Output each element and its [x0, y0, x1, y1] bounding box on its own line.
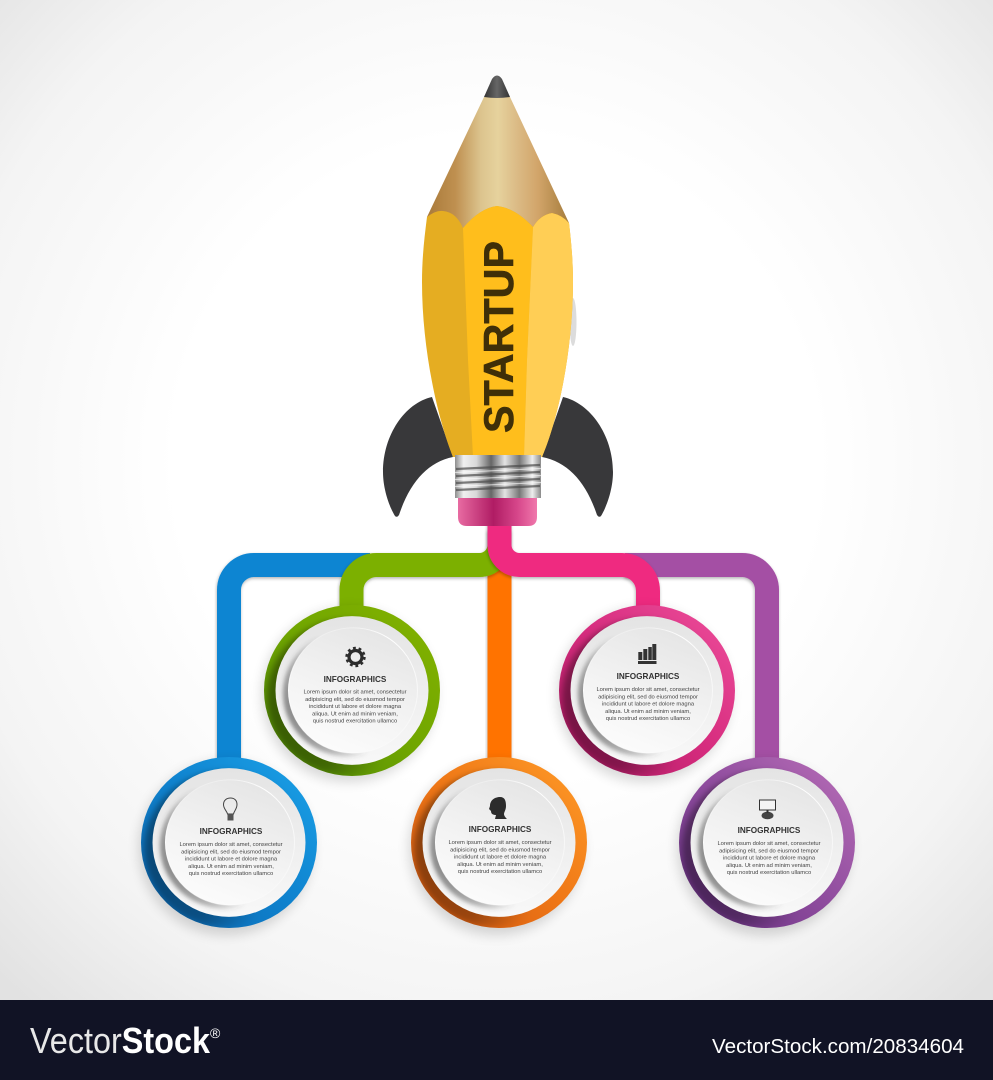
icon: light bulb — [224, 798, 237, 820]
STARTUP label: STARTUP — [475, 241, 522, 433]
body text: quis nostrud exercitation ullamco — [458, 869, 542, 875]
body text: adipisicing elit, sed do eiusmod tempor — [305, 697, 405, 703]
pencil wood tip — [427, 97, 569, 240]
body text: Lorem ipsum dolor sit amet, consectetur — [448, 840, 552, 846]
body text: aliqua. Ut enim ad minim veniam, — [312, 711, 398, 717]
icon: gear — [346, 648, 364, 666]
footer url: VectorStock.com/20834604 — [712, 1036, 964, 1058]
body text: aliqua. Ut enim ad minim veniam, — [726, 863, 812, 869]
rocket: pencil — [383, 76, 613, 526]
body text: Lorem ipsum dolor sit amet, consectetur — [179, 842, 283, 848]
icon: head silhouette — [489, 797, 507, 819]
panel: purple circle — [677, 757, 855, 935]
orange ring — [411, 757, 587, 928]
body text — [717, 841, 821, 876]
heading: INFOGRAPHICS — [200, 827, 263, 836]
heading: INFOGRAPHICS — [738, 826, 801, 835]
connector: purple line — [625, 565, 767, 765]
panel: pink circle — [557, 605, 735, 782]
body text: quis nostrud exercitation ullamco — [606, 716, 690, 722]
body text: adipisicing elit, sed do eiusmod tempor — [181, 849, 281, 855]
panel: blue circle — [139, 757, 317, 935]
body text: incididunt ut labore et dolore magna — [602, 702, 695, 708]
body text — [303, 690, 407, 725]
panel: orange circle — [409, 757, 587, 935]
purple ring — [679, 757, 855, 928]
heading: INFOGRAPHICS — [617, 672, 680, 681]
body text: quis nostrud exercitation ullamco — [189, 871, 273, 877]
body text: Lorem ipsum dolor sit amet, consectetur — [303, 690, 407, 696]
pink ring — [559, 605, 735, 776]
body text: adipisicing elit, sed do eiusmod tempor — [450, 847, 550, 853]
panel: green circle — [262, 605, 440, 782]
icon: monitor — [760, 800, 776, 819]
pencil body — [422, 206, 573, 457]
green ring — [264, 605, 440, 776]
body text: aliqua. Ut enim ad minim veniam, — [188, 864, 274, 870]
body text — [179, 842, 283, 877]
pencil lead — [484, 76, 510, 98]
connector: blue line — [229, 565, 370, 765]
eraser — [458, 498, 537, 526]
body text: Lorem ipsum dolor sit amet, consectetur — [596, 687, 700, 693]
footer: watermark band — [0, 1000, 993, 1080]
registered mark: ® — [210, 1025, 221, 1041]
body text: quis nostrud exercitation ullamco — [313, 719, 397, 725]
heading: INFOGRAPHICS — [324, 675, 387, 684]
blue ring — [141, 757, 317, 928]
body text: Lorem ipsum dolor sit amet, consectetur — [717, 841, 821, 847]
footer logo: VectorStock — [30, 1020, 211, 1061]
rocket side shadow — [570, 298, 576, 346]
body text — [596, 687, 700, 722]
body text: aliqua. Ut enim ad minim veniam, — [605, 709, 691, 715]
connector: orange line — [488, 555, 512, 765]
right fin — [542, 397, 613, 517]
connector: green line — [352, 530, 500, 612]
body text: aliqua. Ut enim ad minim veniam, — [457, 862, 543, 868]
left fin — [383, 397, 453, 517]
body text: adipisicing elit, sed do eiusmod tempor — [719, 848, 819, 854]
body text: incididunt ut labore et dolore magna — [185, 857, 278, 863]
body text: adipisicing elit, sed do eiusmod tempor — [598, 694, 698, 700]
body text: incididunt ut labore et dolore magna — [309, 704, 402, 710]
body text — [448, 840, 552, 875]
body text: incididunt ut labore et dolore magna — [723, 856, 816, 862]
icon: bar chart — [638, 644, 656, 664]
heading: INFOGRAPHICS — [469, 825, 532, 834]
body text: quis nostrud exercitation ullamco — [727, 870, 811, 876]
body text: incididunt ut labore et dolore magna — [454, 855, 547, 861]
metal ferrule — [455, 455, 541, 498]
connector: pink line — [500, 520, 648, 612]
